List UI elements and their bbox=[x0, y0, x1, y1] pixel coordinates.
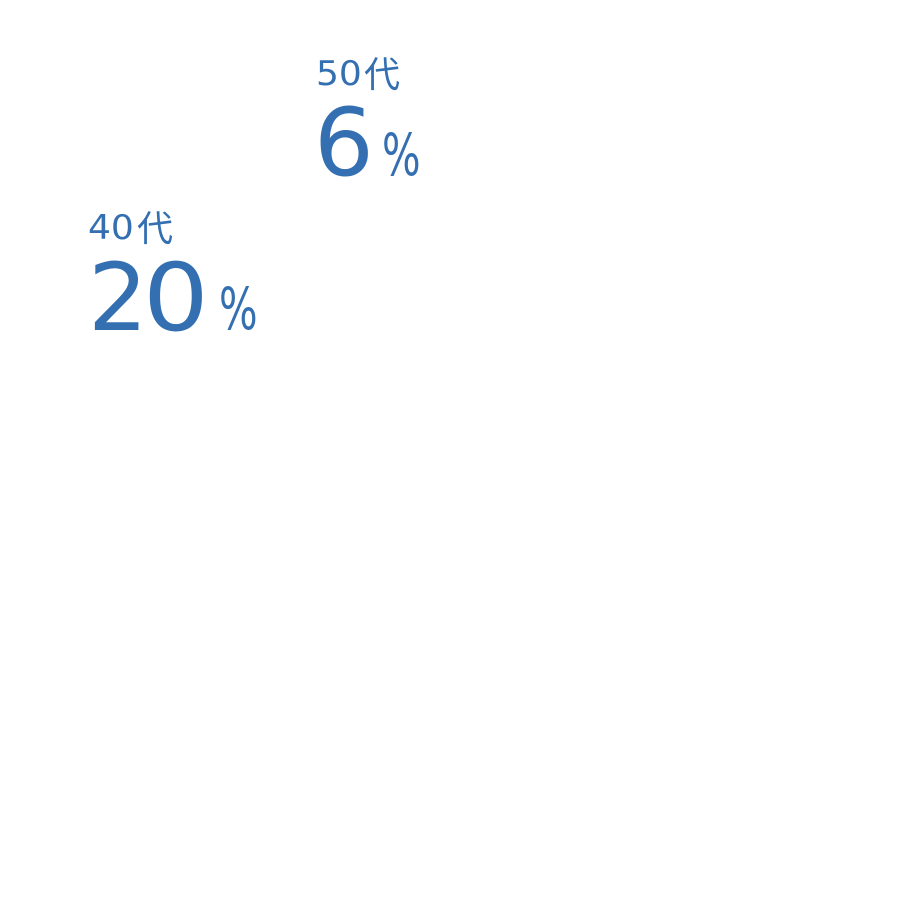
value: 20: 2 bbox=[88, 244, 148, 353]
stat: 40s age group, 20 percent bbox=[88, 208, 258, 353]
value: 20 bbox=[88, 243, 209, 353]
label: 50代: 代 bbox=[364, 54, 400, 95]
label: 40代: 40 bbox=[88, 208, 134, 248]
label: 50代 bbox=[316, 54, 400, 95]
label: 50代: 50 bbox=[316, 54, 362, 94]
label: 40代 bbox=[88, 208, 173, 249]
value: 6: 6 bbox=[314, 89, 374, 198]
label: 40代: 代 bbox=[137, 208, 173, 249]
value: 20: 0 bbox=[143, 243, 209, 353]
unit: percent: % bbox=[219, 276, 258, 343]
stat: 50s age group, 6 percent bbox=[314, 54, 421, 198]
unit: percent: % bbox=[382, 122, 421, 189]
